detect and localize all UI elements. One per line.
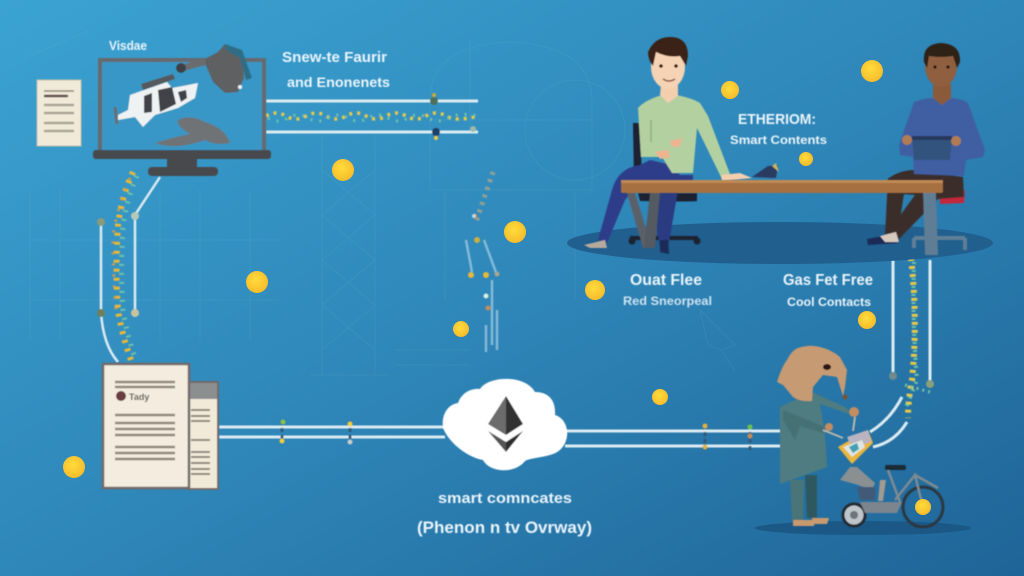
label: gas fee: Cool Contacts (787, 295, 871, 309)
small wheel (843, 504, 865, 526)
hands (902, 135, 912, 145)
ethereum diamond (488, 396, 523, 452)
front page (103, 364, 189, 488)
hand (721, 173, 752, 181)
person with hair bottom right (777, 346, 873, 526)
monitor frame (100, 60, 264, 154)
bag (838, 430, 873, 464)
label: left fee: Red Sneorpeal (623, 294, 712, 308)
monitor with machine (93, 44, 271, 176)
back window (188, 382, 218, 489)
pipes: middle tower dots (466, 172, 500, 352)
shoes (584, 240, 607, 248)
hands (849, 407, 859, 417)
head (651, 45, 685, 89)
machine body (118, 82, 198, 127)
shirt (638, 95, 730, 179)
chair (633, 123, 642, 180)
trouser legs (598, 160, 693, 243)
shoe (867, 235, 898, 245)
caption under cloud (417, 490, 592, 537)
pipes: monitor to document (97, 172, 160, 362)
table top (621, 180, 943, 193)
tablet (912, 137, 952, 160)
table (621, 163, 943, 255)
bottom right shadow (755, 521, 971, 535)
stool (940, 190, 965, 204)
items on table (752, 165, 778, 178)
heading: ethereum smart contracts: ETHERIOM: (738, 111, 816, 128)
table scene shadow (567, 222, 993, 264)
monitor stand (167, 158, 197, 168)
heading: ethereum smart contracts: Smart Contents (730, 133, 827, 147)
person left (584, 37, 752, 254)
rear wheel (903, 487, 943, 527)
heading: ethereum smart contracts (730, 111, 827, 147)
seat (885, 465, 906, 470)
label: gas fee (783, 272, 873, 309)
caption under cloud: smart comncates (438, 490, 572, 507)
person right (867, 43, 985, 250)
label: left fee (623, 272, 712, 308)
title text: top middle: and Enonenets (287, 74, 390, 90)
neck (660, 85, 678, 103)
sweater (899, 98, 985, 176)
document icon: small paper (37, 80, 81, 146)
document stack (103, 364, 218, 489)
pipes: top connection (266, 93, 478, 140)
legs (790, 480, 804, 520)
trousers (888, 170, 964, 240)
title text: top middle (282, 49, 390, 90)
feet (793, 520, 815, 526)
coat (780, 392, 849, 484)
machine ring shadow (155, 117, 230, 146)
hair (777, 346, 847, 401)
bicycle (840, 465, 943, 527)
table legs (627, 193, 652, 248)
coins (63, 60, 931, 515)
label: left fee: Ouat Flee (630, 272, 702, 289)
casters (628, 238, 636, 244)
pipes: document to cloud to person (219, 420, 782, 451)
pipes: table to person (870, 258, 934, 447)
machine arm head (203, 44, 244, 93)
head (925, 45, 957, 87)
label: vision: Visdae (109, 38, 147, 53)
ghost technical drawings (20, 30, 735, 375)
neck (933, 84, 951, 105)
caption under cloud: (Phenon n tv Ovrway) (417, 518, 592, 537)
label: gas fee: Gas Fet Free (783, 272, 873, 289)
frame (888, 470, 938, 507)
title text: top middle: Snew-te Faurir (282, 49, 387, 66)
cloud with ethereum logo (443, 379, 567, 470)
document stack: Tady (129, 392, 149, 402)
